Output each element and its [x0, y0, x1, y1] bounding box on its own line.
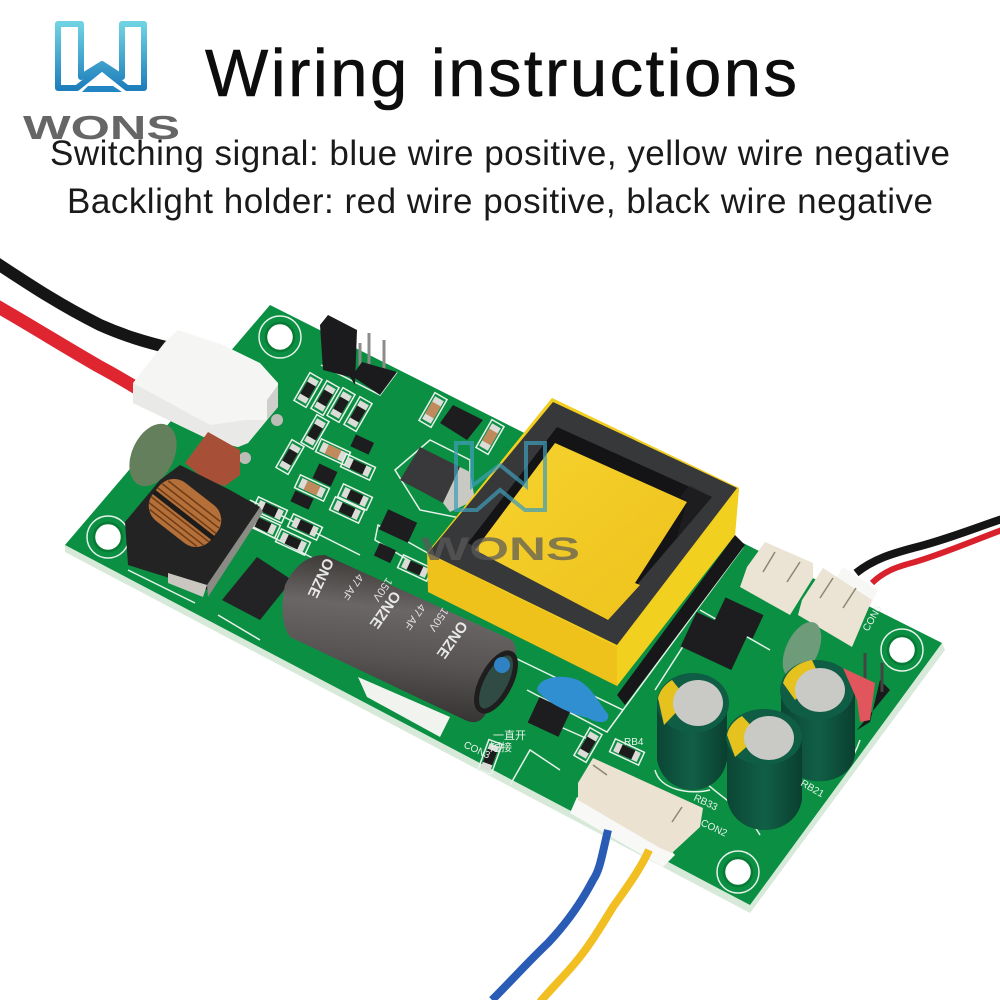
large electrolytic capacitor: 47 AF [401, 601, 427, 632]
large electrolytic capacitor: ONZE [433, 618, 471, 662]
circuit board [65, 305, 945, 913]
red jumper [843, 653, 890, 730]
jumper header [320, 315, 397, 395]
board labels: CON6 [861, 604, 885, 634]
bottom connector [570, 758, 703, 867]
white pad under capacitor [358, 677, 450, 737]
wires: blue and yellow [492, 830, 649, 1000]
watermark [421, 443, 580, 567]
bridge rectifier [222, 557, 292, 620]
board labels [462, 604, 885, 840]
brown film capacitor [185, 432, 240, 486]
large electrolytic capacitor: 150V [425, 605, 450, 634]
white connector left [133, 330, 283, 464]
board labels: 短接 [490, 740, 512, 754]
title: Wiring instructions [205, 36, 797, 111]
large electrolytic capacitor [282, 555, 523, 722]
board labels: RB21 [798, 778, 826, 800]
green electrolytic capacitors [657, 660, 855, 830]
green varistor right [775, 616, 829, 684]
blue capacitor [537, 677, 608, 722]
text: backlight holder: Backlight holder: red wire positive, black wire negative [67, 182, 933, 221]
large electrolytic capacitor: ONZE [366, 588, 404, 632]
board labels: CON3 [462, 740, 492, 762]
wires: right black and red [856, 519, 1000, 583]
large electrolytic capacitor: ONZE [304, 555, 337, 600]
board labels: 一直开 [493, 728, 526, 742]
transformer [427, 398, 745, 705]
large electrolytic capacitor: 47 AF [339, 571, 365, 602]
right connectors [740, 542, 878, 647]
logo: WONS [23, 24, 180, 146]
small SMD components [246, 373, 764, 774]
common mode choke [125, 465, 263, 597]
green varistor [120, 416, 186, 494]
large electrolytic capacitor: 150V [369, 575, 394, 604]
board labels: CON2 [699, 818, 729, 840]
wires: left black and red [0, 262, 170, 390]
logo: WONS: WONS [23, 109, 180, 146]
board labels: RB4 [624, 737, 644, 748]
board labels: RB33 [692, 793, 719, 813]
text: switching signal: Switching signal: blue wire positive, yellow wire negative [50, 134, 950, 173]
watermark: WONS [421, 531, 580, 567]
